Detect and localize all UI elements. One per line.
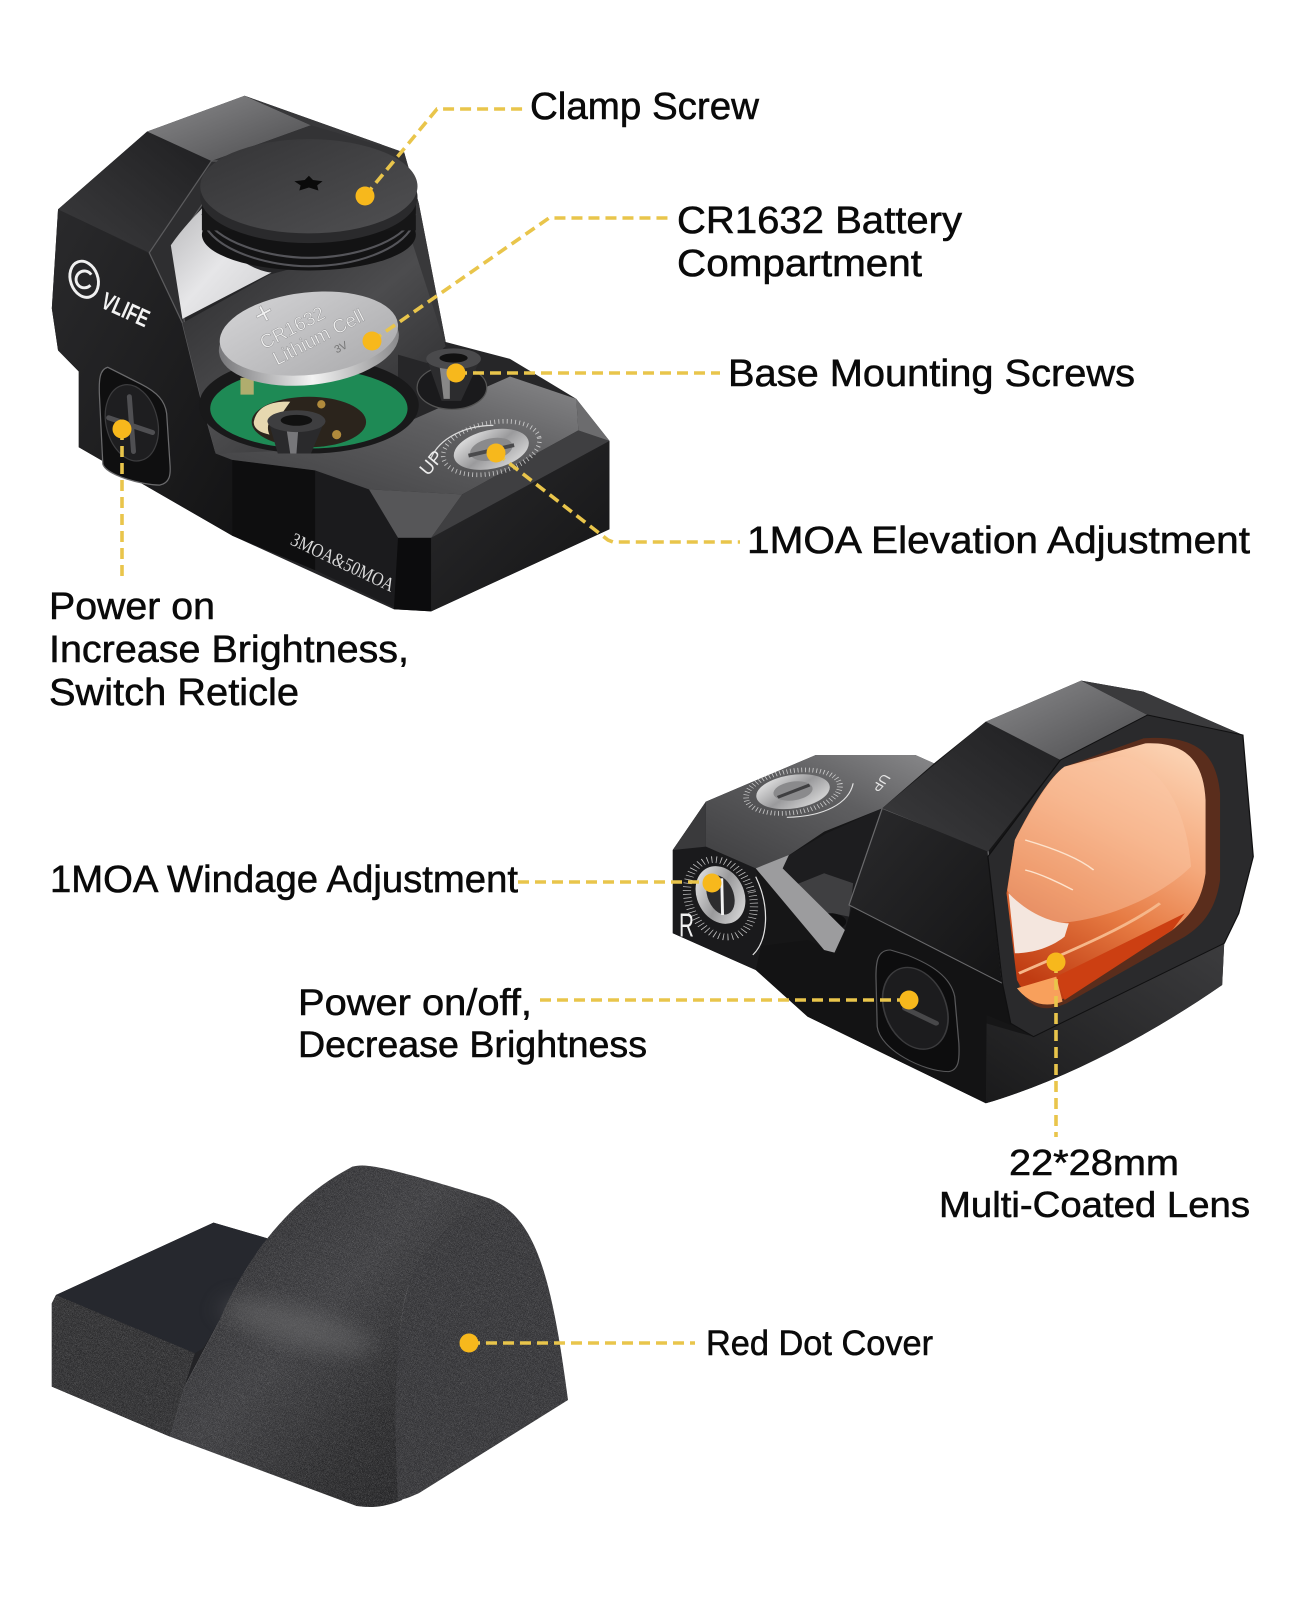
leader line: clamp screw bbox=[365, 109, 525, 196]
hood bevel bbox=[58, 132, 211, 253]
label: Power on Increase Brightness, Switch Reticle: Power on bbox=[49, 586, 215, 628]
leader line: power on/off bbox=[540, 998, 909, 1002]
coin battery bbox=[215, 283, 403, 394]
label: Power on Increase Brightness, Switch Reticle: Increase Brightness, bbox=[49, 629, 409, 671]
PCB compartment bbox=[199, 357, 419, 454]
marker dot: cover bbox=[460, 1334, 478, 1352]
battery clamp cap bbox=[200, 139, 418, 270]
side windage dial: R bbox=[679, 907, 694, 944]
label: Power on/off, Decrease Brightness: Decrease Brightness bbox=[298, 1024, 647, 1065]
label: 22*28mm Multi-Coated Lens: 22*28mm bbox=[1009, 1142, 1179, 1183]
label: 22*28mm Multi-Coated Lens: Multi-Coated Lens bbox=[939, 1184, 1250, 1225]
hood rear rim bbox=[1081, 681, 1243, 735]
top windage scale dial: UP bbox=[868, 772, 894, 794]
window reflection bbox=[171, 205, 272, 319]
leader line: battery compartment bbox=[372, 218, 671, 341]
front screw bbox=[267, 410, 325, 454]
hood roof behind cap bbox=[199, 125, 415, 203]
cover silhouette bbox=[52, 1223, 267, 1437]
label: Power on/off, Decrease Brightness bbox=[298, 982, 647, 1065]
main body left face bbox=[52, 209, 232, 536]
label: Power on Increase Brightness, Switch Reticle: Switch Reticle bbox=[49, 672, 299, 714]
CVLIFE logo: VLIFE bbox=[97, 288, 153, 333]
leader line: lens bbox=[1054, 962, 1058, 1137]
top plate with bevel bbox=[673, 755, 934, 953]
marker dot: windage bbox=[702, 874, 722, 892]
power button bbox=[98, 367, 170, 485]
cover front face bbox=[396, 1198, 568, 1500]
label: CR1632 Battery Compartment: CR1632 Battery bbox=[677, 200, 962, 242]
lower body side bbox=[756, 905, 1011, 1103]
label: Power on/off, Decrease Brightness: Power on/off, bbox=[298, 982, 532, 1023]
marker dot: elevation bbox=[486, 444, 506, 462]
label: 1MOA Elevation Adjustment: 1MOA Elevation Adjustment bbox=[747, 520, 1250, 562]
coin battery: CR1632 bbox=[257, 303, 329, 354]
side windage dial bbox=[677, 854, 766, 955]
marker dot: clamp screw bbox=[356, 186, 374, 206]
hood bevel bbox=[882, 722, 1060, 852]
label: Power on Increase Brightness, Switch Reticle bbox=[49, 586, 409, 714]
coin battery: 3V bbox=[333, 339, 350, 356]
hood front frame bbox=[988, 715, 1253, 1037]
body silhouette bbox=[673, 681, 1253, 1103]
marker dot: power off bbox=[900, 990, 918, 1010]
hood inner frame bbox=[149, 161, 232, 451]
marker dot: power on bbox=[112, 420, 132, 438]
top plate bbox=[216, 377, 578, 494]
engraved text 3MOA&50MOA: 3MOA&50MOA bbox=[287, 529, 398, 597]
marker dot: lens bbox=[1046, 952, 1066, 972]
marker dot: base screw bbox=[446, 364, 466, 382]
marker dot: battery bbox=[362, 332, 382, 350]
leader line: power on bbox=[120, 429, 124, 582]
coin battery: Lithium Cell bbox=[270, 306, 368, 370]
cover rear block top bbox=[56, 1223, 267, 1353]
label: Clamp Screw: Clamp Screw bbox=[530, 86, 760, 128]
lens bbox=[1007, 738, 1220, 1008]
cover rear block side bbox=[52, 1295, 195, 1437]
label: Red Dot Cover: Red Dot Cover bbox=[706, 1324, 933, 1363]
cover main curved body bbox=[170, 1165, 490, 1507]
plate bevels bbox=[369, 399, 609, 538]
coin battery: + bbox=[247, 293, 280, 334]
leader line: base mounting screws bbox=[456, 371, 720, 375]
base mounting screw bbox=[417, 348, 487, 409]
cover body highlight bbox=[217, 1288, 380, 1366]
base front block bbox=[986, 943, 1224, 1103]
body silhouette bbox=[52, 96, 609, 611]
leader line: windage adjustment bbox=[518, 880, 712, 884]
label: CR1632 Battery Compartment bbox=[677, 200, 962, 285]
sight: open top view with battery compartment bbox=[52, 96, 609, 611]
hood top band bbox=[986, 681, 1148, 760]
hood side face bbox=[849, 808, 1002, 983]
CVLIFE logo bbox=[65, 257, 153, 333]
left dial face bbox=[673, 802, 767, 970]
leader line: cover bbox=[469, 1341, 695, 1345]
power off button bbox=[873, 950, 959, 1072]
leader line: elevation adjustment bbox=[496, 453, 740, 542]
label: Base Mounting Screws: Base Mounting Screws bbox=[728, 353, 1135, 395]
top windage scale dial bbox=[741, 763, 894, 820]
sight: front view with lens bbox=[673, 681, 1253, 1103]
red dot cover bbox=[52, 1165, 568, 1507]
hood rear rim bbox=[245, 96, 446, 346]
hood top band bbox=[147, 96, 311, 161]
elevation dial: UP bbox=[415, 446, 447, 479]
elevation dial bbox=[415, 413, 544, 483]
label: 1MOA Windage Adjustment: 1MOA Windage Adjustment bbox=[50, 859, 518, 901]
label: 22*28mm Multi-Coated Lens bbox=[939, 1142, 1250, 1225]
base lower faces bbox=[232, 441, 609, 611]
interior wall bbox=[182, 237, 446, 454]
label: CR1632 Battery Compartment: Compartment bbox=[677, 243, 922, 285]
